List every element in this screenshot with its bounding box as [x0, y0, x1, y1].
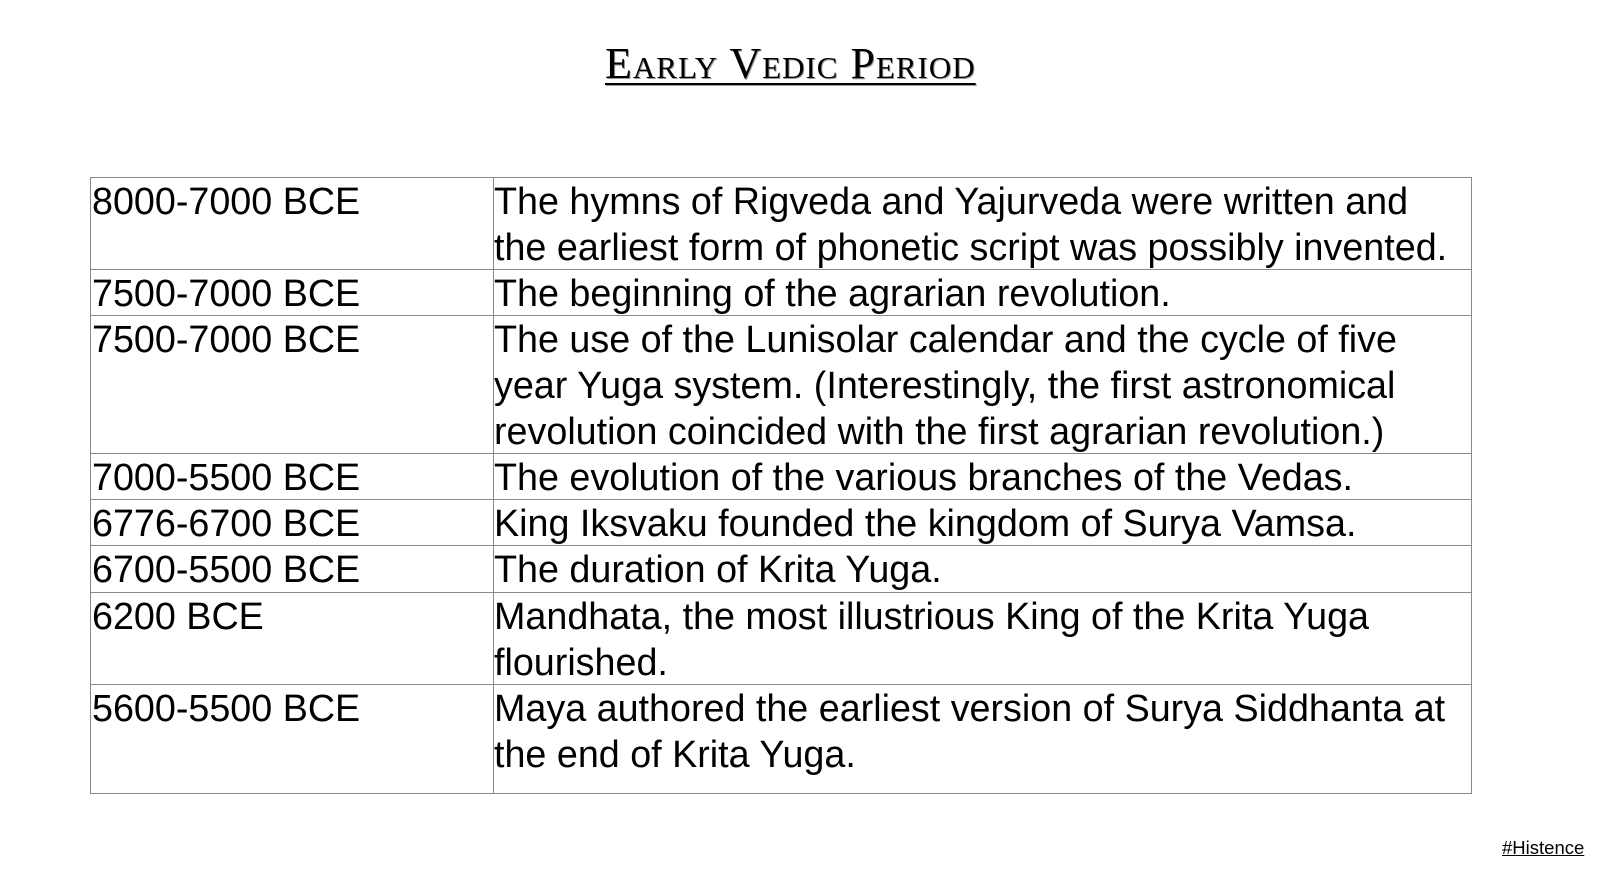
- row 5: [91, 500, 1471, 546]
- row 2: [91, 270, 1471, 316]
- row 6: 6700-5500 BCE: [92, 548, 360, 590]
- row 2: The beginning of the agrarian revolution.: [494, 272, 1171, 314]
- row 2: 7500-7000 BCE: [92, 272, 360, 314]
- row 4: The evolution of the various branches of the Vedas.: [494, 456, 1353, 498]
- row 1: the earliest form of phonetic script was possibly invented.: [494, 226, 1447, 268]
- row 3: [91, 316, 1471, 454]
- row 7: [91, 593, 1471, 685]
- row 7: flourished.: [494, 641, 668, 683]
- row 5: 6776-6700 BCE: [92, 502, 360, 544]
- hashtag: #Histence: [1502, 837, 1584, 858]
- row 8: [92, 687, 1445, 775]
- row 1: The hymns of Rigveda and Yajurveda were written and: [494, 180, 1408, 222]
- table: timeline: [90, 177, 1472, 794]
- row 6: The duration of Krita Yuga.: [494, 548, 942, 590]
- row 8: Maya authored the earliest version of Surya Siddhanta at: [494, 687, 1445, 729]
- row 3: revolution coincided with the first agrarian revolution.): [494, 410, 1384, 452]
- row 7: 6200 BCE: [92, 595, 264, 637]
- row 6: [91, 546, 1471, 593]
- row 8: 5600-5500 BCE: [92, 687, 360, 729]
- row 7: Mandhata, the most illustrious King of the Krita Yuga: [494, 595, 1369, 637]
- row 4: [91, 454, 1471, 500]
- row 1: 8000-7000 BCE: [92, 180, 360, 222]
- row 8: the end of Krita Yuga.: [494, 733, 856, 775]
- row 5: King Iksvaku founded the kingdom of Surya Vamsa.: [494, 502, 1356, 544]
- title: Early Vedic Period: [605, 39, 976, 88]
- row 3: year Yuga system. (Interestingly, the first astronomical: [494, 364, 1395, 406]
- row 3: 7500-7000 BCE: [92, 318, 360, 360]
- row 3: The use of the Lunisolar calendar and the cycle of five: [494, 318, 1397, 360]
- row 4: 7000-5500 BCE: [92, 456, 360, 498]
- row 1: [91, 178, 1471, 270]
